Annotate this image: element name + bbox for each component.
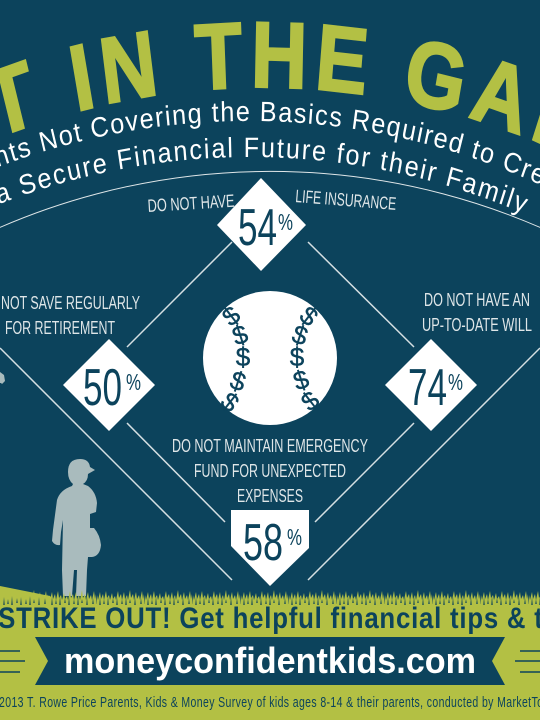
stitches: dollar signs: $	[215, 386, 245, 419]
stitches: dollar signs: $	[216, 299, 246, 332]
stat: will: %	[448, 369, 463, 395]
stat: retirement: 50	[83, 359, 122, 417]
outfield arc	[0, 171, 540, 257]
stat: life insurance	[147, 178, 397, 271]
stitches: dollar signs: $	[289, 363, 313, 397]
stat: emergency fund: EXPENSES	[237, 486, 303, 506]
stat: emergency fund: %	[287, 524, 302, 550]
subtitle: a Secure Financial Future for their Family	[0, 137, 528, 216]
stat: life insurance: LIFE INSURANCE	[295, 186, 397, 214]
stat: emergency fund: FUND FOR UNEXPECTED	[194, 461, 346, 481]
outfield grass	[0, 586, 540, 720]
speed lines	[0, 651, 540, 672]
stat: emergency fund: DO NOT MAINTAIN EMERGENCY	[172, 436, 368, 456]
stitches: dollar signs: $	[290, 342, 305, 372]
stat: retirement	[0, 293, 155, 431]
stitches: dollar signs: $	[228, 318, 252, 352]
stat: will	[385, 290, 532, 431]
banner: moneyconfidentkids.com	[64, 640, 476, 681]
stat: life insurance: 54	[238, 199, 277, 257]
silhouette: far player	[0, 372, 5, 384]
stitches: dollar signs: $	[288, 318, 312, 352]
stitches: dollar signs: $	[236, 342, 251, 372]
stat: will: 74	[408, 359, 447, 417]
stitches: dollar signs: $	[294, 300, 324, 333]
stat: life insurance: %	[278, 209, 293, 235]
silhouette: boy with glove	[52, 459, 101, 596]
stitches: dollar signs: $	[226, 364, 250, 398]
stat: retirement: %	[126, 369, 141, 395]
baseball	[203, 291, 337, 425]
stat: life insurance: DO NOT HAVE	[147, 191, 235, 216]
stat: emergency fund: 58	[243, 514, 283, 572]
stat: emergency fund	[172, 436, 368, 586]
stitches: dollar signs: $	[295, 384, 325, 417]
stat: retirement: FOR RETIREMENT	[5, 318, 115, 338]
stitches: dollar signs	[215, 299, 325, 419]
infield lines	[0, 242, 540, 580]
